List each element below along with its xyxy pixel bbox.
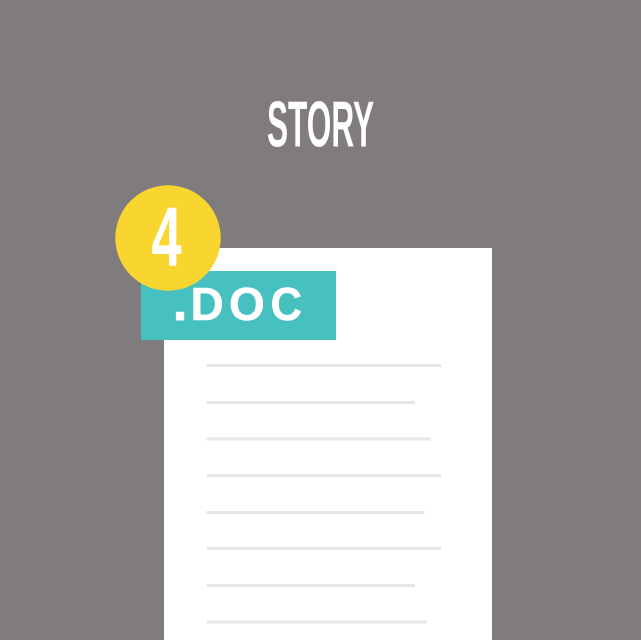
file type label: O: [229, 278, 265, 330]
number badge: 4: [152, 190, 182, 284]
file type label: C: [270, 278, 302, 330]
file type label: D: [190, 278, 224, 330]
file type label: .: [172, 268, 188, 334]
document page: [164, 248, 492, 640]
text lines: [206, 364, 441, 624]
infographic canvas: STORY: [267, 88, 374, 160]
file type label: [141, 268, 336, 340]
number badge: [115, 185, 221, 291]
